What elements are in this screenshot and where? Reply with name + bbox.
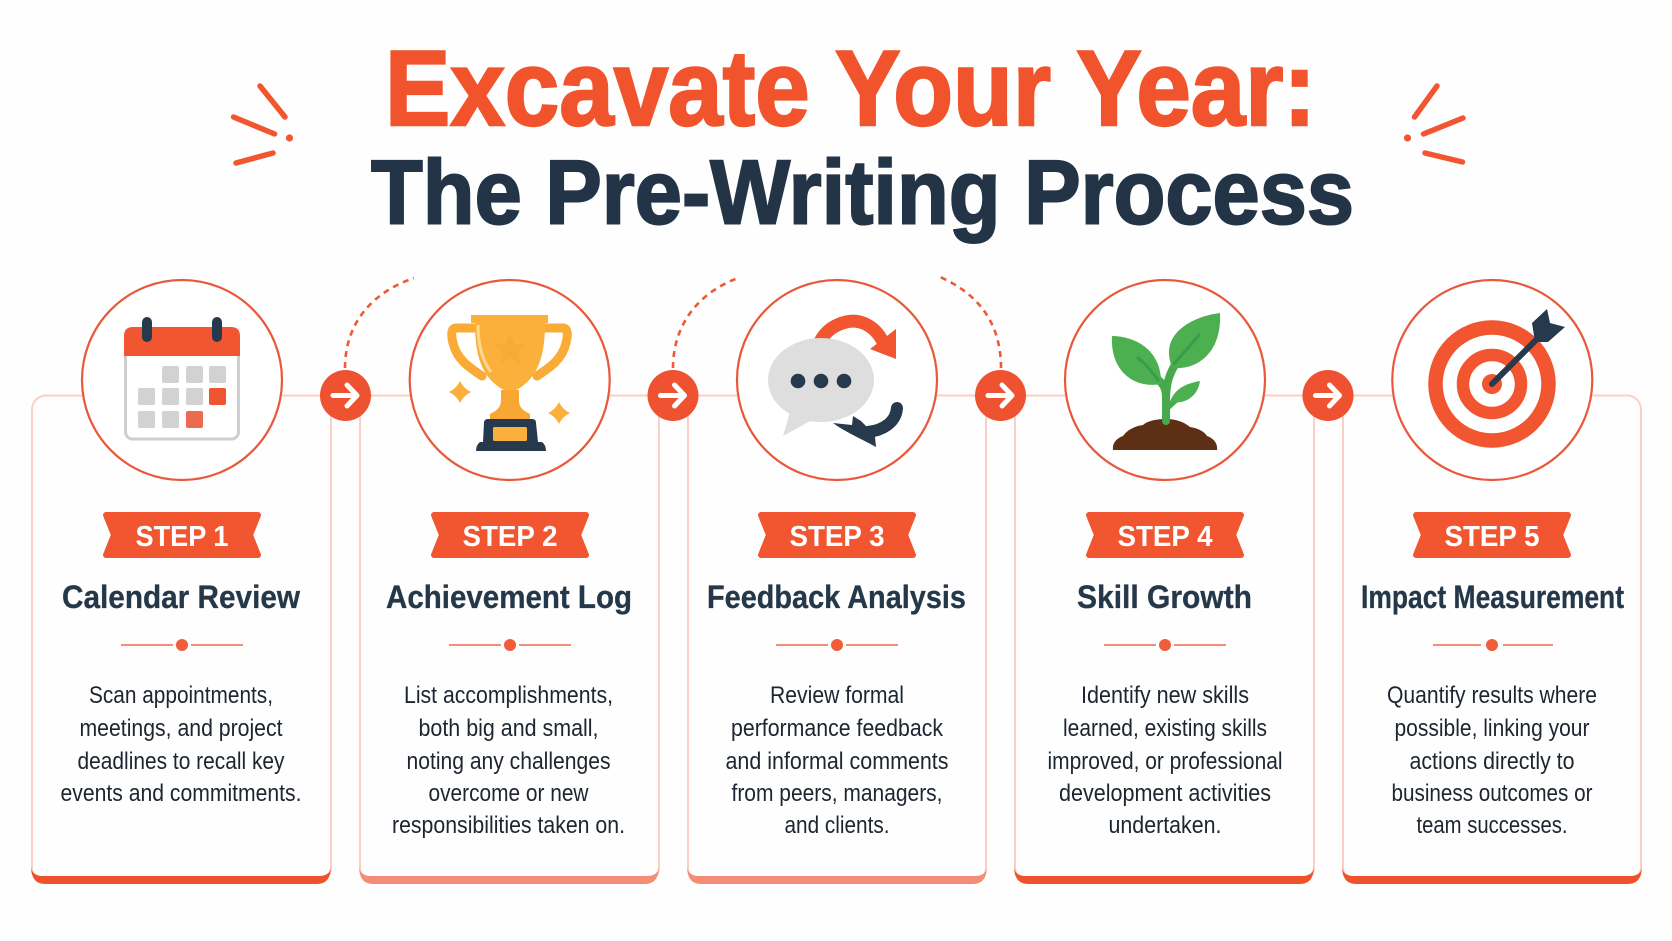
heading: Skill Growth (1077, 579, 1252, 615)
body text: overcome or new (428, 780, 589, 807)
panel: step 5 impact measurement (1342, 280, 1642, 884)
body text: performance feedback (731, 715, 944, 742)
step badge (1416, 515, 1568, 555)
body text: Identify new skills (1081, 682, 1249, 709)
body text: actions directly to (1410, 748, 1574, 775)
heading: Calendar Review (62, 579, 300, 615)
divider (1433, 639, 1553, 651)
body text: meetings, and project (80, 715, 283, 742)
body text (1048, 682, 1282, 839)
step badge: STEP 5 (1444, 521, 1540, 553)
title: The Pre-Writing Process (371, 142, 1354, 244)
step badge: STEP 3 (790, 521, 884, 553)
dashed arc: to step 2 (345, 278, 414, 368)
step badge (434, 515, 586, 555)
body text: from peers, managers, (732, 780, 942, 807)
dashed arc: to step 3 (673, 278, 738, 368)
connector line (281, 394, 1393, 396)
icon: right accent sparks (1404, 86, 1463, 162)
body text: events and commitments. (60, 780, 302, 807)
body text: business outcomes or (1392, 780, 1593, 807)
body text: undertaken. (1108, 812, 1222, 839)
divider (1104, 639, 1226, 651)
icon: left accent sparks (234, 86, 293, 163)
body text: Scan appointments, (89, 682, 273, 709)
arrow: step 3 to 4 (975, 370, 1026, 421)
body text: improved, or professional (1048, 748, 1282, 775)
divider (776, 639, 898, 651)
arrow: step 2 to 3 (648, 370, 698, 421)
title (371, 28, 1354, 244)
body text (60, 682, 302, 807)
body text: responsibilities taken on. (392, 812, 625, 839)
body text (726, 682, 948, 839)
divider (449, 639, 571, 651)
step badge: STEP 1 (136, 521, 228, 553)
step badge (761, 515, 913, 555)
icon: trophy (449, 315, 570, 451)
step badge: STEP 4 (1118, 521, 1212, 553)
icon: target with arrow (1436, 309, 1565, 440)
icon: speech bubble with cycle arrows (768, 321, 897, 447)
step badge: STEP 2 (462, 521, 558, 553)
icon: calendar (124, 317, 240, 439)
body text: and informal comments (726, 748, 948, 775)
panel: step 4 skill growth (1014, 280, 1314, 884)
dashed arc: from step 3 (940, 277, 1001, 368)
heading: Impact Measurement (1361, 579, 1624, 615)
icon: seedling (1112, 313, 1220, 450)
body text: possible, linking your (1394, 715, 1590, 742)
step badge (1089, 515, 1241, 555)
body text: Review formal (770, 682, 904, 709)
panel: step 1 calendar review (31, 280, 331, 884)
body text: Quantify results where (1387, 682, 1597, 709)
arrow: step 1 to 2 (320, 370, 371, 421)
heading: Feedback Analysis (707, 579, 966, 615)
body text: learned, existing skills (1063, 715, 1267, 742)
panel: step 3 feedback analysis (687, 280, 987, 884)
panel: step 2 achievement log (359, 280, 659, 884)
title: Excavate Your Year: (385, 28, 1316, 148)
body text: deadlines to recall key (78, 748, 284, 775)
body text: and clients. (784, 812, 890, 839)
body text: both big and small, (418, 715, 598, 742)
step badge (106, 515, 258, 555)
body text: team successes. (1416, 812, 1568, 839)
divider (121, 639, 243, 651)
body text: noting any challenges (406, 748, 610, 775)
heading: Achievement Log (386, 579, 632, 615)
arrow: step 4 to 5 (1302, 370, 1354, 421)
body text (1387, 682, 1597, 839)
body text: List accomplishments, (404, 682, 613, 709)
body text (392, 682, 625, 839)
body text: development activities (1059, 780, 1271, 807)
